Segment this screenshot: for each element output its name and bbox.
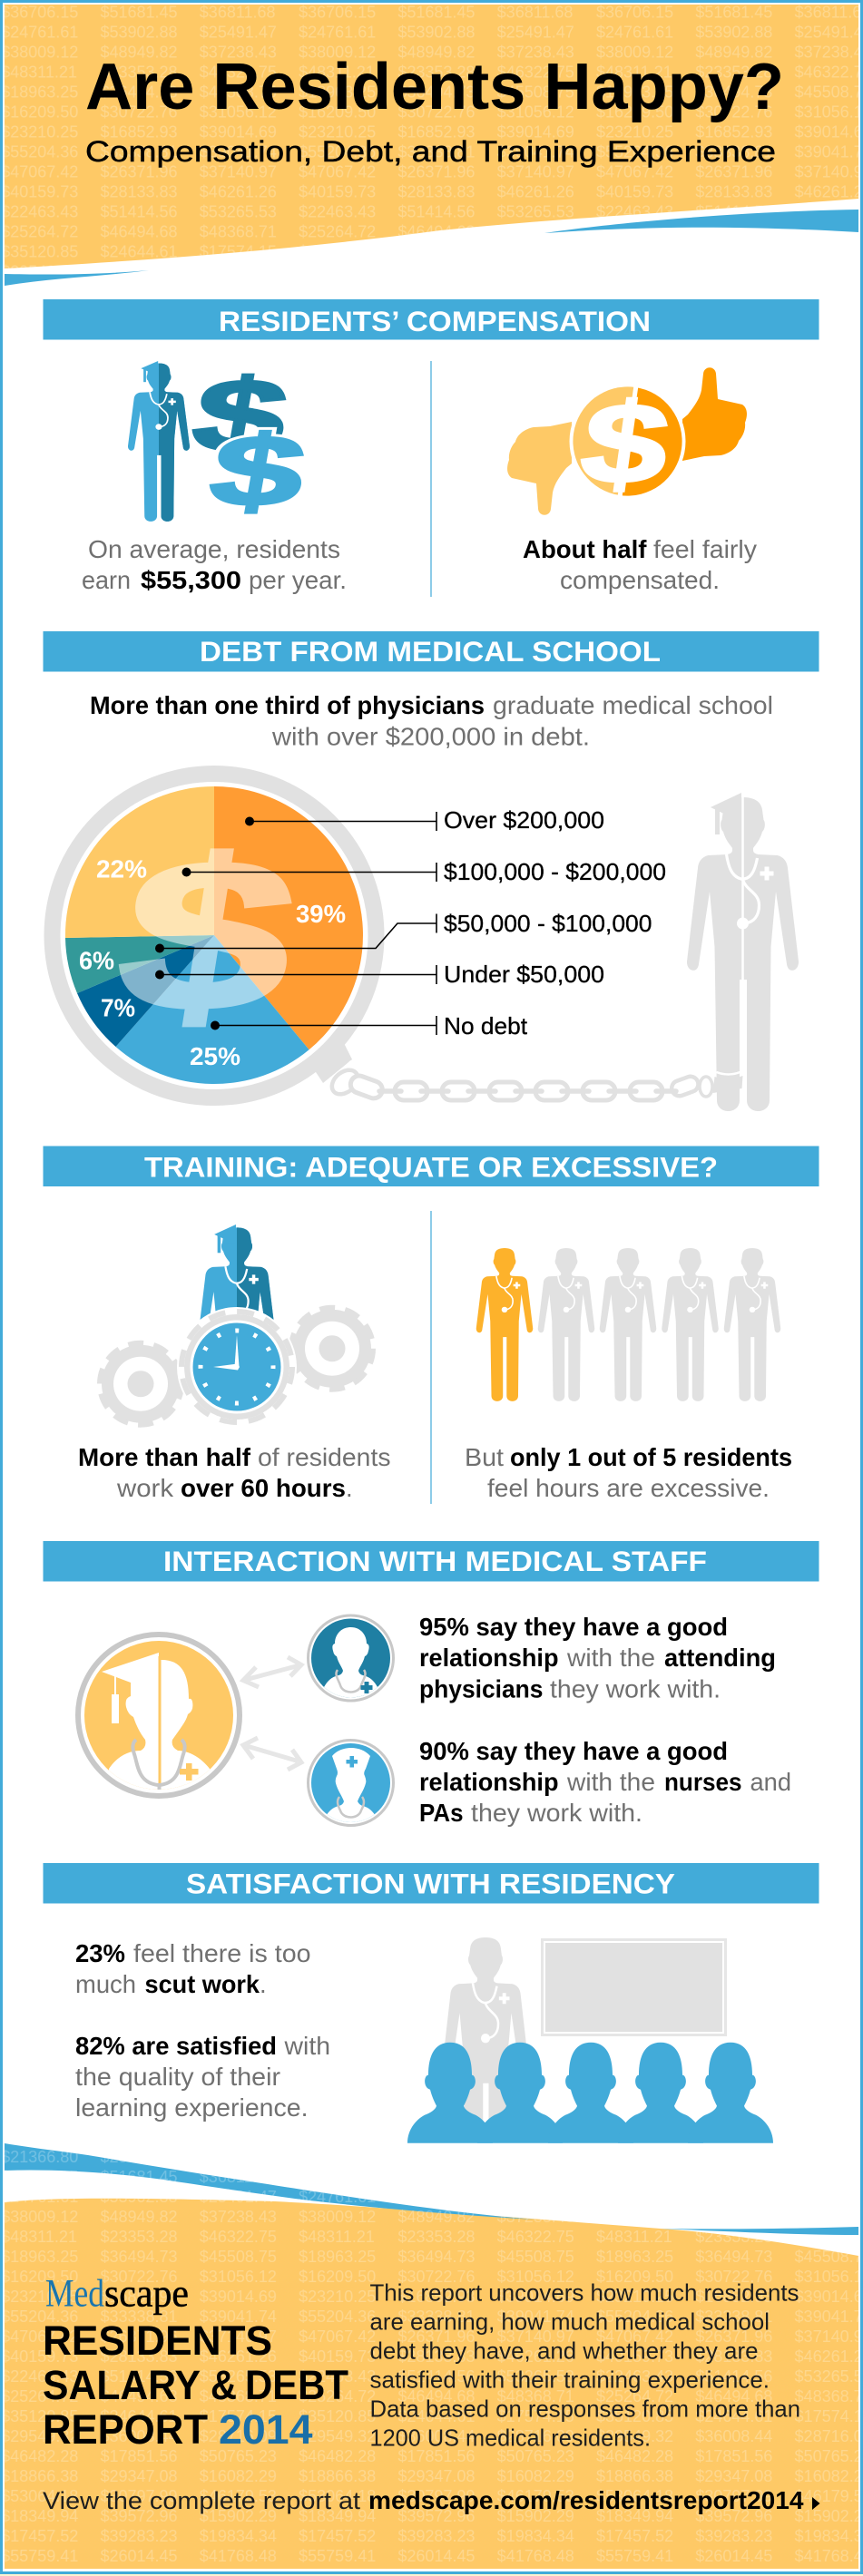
section heading: satisfaction: SATISFACTION WITH RESIDENCY: [186, 1867, 675, 1899]
percent labels: 39%: [296, 900, 346, 928]
text: relationship with nurses: relationship: [419, 1768, 559, 1796]
text: excessive hours: But: [465, 1443, 504, 1471]
text: scut work: feel there is too: [133, 1939, 310, 1967]
text: debt intro: with over $200,000 in debt.: [271, 722, 590, 751]
text: learning experience: 82% are satisfied: [75, 2032, 277, 2060]
text: fairly compensated: About half: [523, 535, 647, 563]
text: report description: 1200 US medical residents.: [370, 2424, 651, 2451]
section heading: training: TRAINING: ADEQUATE OR EXCESSIVE?: [144, 1150, 718, 1183]
report title: [43, 2317, 348, 2453]
call to action: medscape.com/residentsreport2014: [368, 2486, 804, 2514]
text: relationship with nurses: they work with.: [471, 1799, 642, 1827]
text: report description: This report uncovers how much residents: [370, 2278, 799, 2306]
text: relationship with attendings: with the: [566, 1644, 655, 1672]
icon: audience: [407, 2043, 773, 2143]
text: average earnings: per year.: [249, 566, 347, 594]
text: hours worked: .: [346, 1474, 353, 1502]
legend labels: Under $50,000: [444, 961, 604, 988]
percent labels: 7%: [101, 994, 135, 1021]
icon: grey residents: [538, 1248, 780, 1401]
legend labels: Over $200,000: [444, 806, 604, 834]
pie chart: debt distribution: [53, 774, 376, 1098]
icon: resident bust: [200, 1225, 274, 1320]
logo: Medscape: Med: [45, 2273, 104, 2315]
text: learning experience: [75, 2032, 330, 2122]
text: report description: [370, 2278, 800, 2451]
icon: five residents: [476, 1248, 780, 1401]
section heading: compensation: [44, 299, 819, 339]
section heading: training: [44, 1147, 819, 1186]
text: fairly compensated: compensated.: [560, 566, 720, 594]
slice: 50,000 to 100,000: [65, 935, 214, 993]
legend labels: $50,000 - $100,000: [444, 910, 652, 937]
text: hours worked: work: [116, 1474, 173, 1502]
icon: resident figure: [128, 361, 190, 522]
text: fairly compensated: feel fairly: [653, 535, 757, 563]
text: excessive hours: [465, 1443, 792, 1502]
icon: thumb up: [682, 367, 747, 461]
text: learning experience: the quality of their: [75, 2063, 280, 2091]
text: hours worked: More than half: [78, 1443, 251, 1471]
text: average earnings: earn: [82, 566, 131, 594]
section heading: interaction: INTERACTION WITH MEDICAL STAFF: [163, 1545, 707, 1577]
section heading: debt: DEBT FROM MEDICAL SCHOOL: [200, 635, 661, 668]
text: average earnings: $55,300: [141, 566, 241, 594]
text: learning experience: learning experience.: [75, 2093, 309, 2122]
title: Are Residents Happy?: [85, 51, 784, 123]
section heading: satisfaction: [44, 1863, 819, 1903]
icon: light dollar: $: [202, 415, 313, 526]
text: relationship with attendings: they work with.: [550, 1674, 721, 1703]
text: relationship with nurses: PAs: [419, 1799, 463, 1827]
icon: teacher: [445, 1937, 526, 2121]
text: relationship with nurses: and: [750, 1768, 791, 1796]
text: relationship with attendings: physicians: [419, 1674, 543, 1703]
legend labels: No debt: [444, 1012, 528, 1039]
legend labels: $100,000 - $200,000: [444, 858, 666, 885]
text: average earnings: On average, residents: [88, 535, 340, 563]
icon: grey resident in chains: [687, 793, 799, 1111]
text: report description: Data based on responses from more than: [370, 2395, 800, 2422]
report title: RESIDENTS: [43, 2317, 272, 2364]
text: scut work: .: [260, 1970, 267, 1998]
text: relationship with attendings: 95% say they have a good: [419, 1613, 728, 1641]
icon: clock in central gear: [177, 1307, 297, 1427]
icon: attending physician: [309, 1615, 394, 1705]
subtitle: Compensation, Debt, and Training Experience: [85, 135, 776, 168]
report title: 2014: [219, 2406, 312, 2453]
icon: nurse: [309, 1740, 394, 1825]
text: scut work: [75, 1939, 310, 1998]
icon: thumb down: [507, 422, 572, 515]
text: hours worked: over 60 hours: [181, 1474, 346, 1502]
text: fairly compensated: [523, 535, 757, 594]
text: relationship with nurses: [419, 1737, 791, 1827]
report title: REPORT: [43, 2406, 208, 2453]
logo: Medscape: [45, 2273, 189, 2315]
report title: DEBT: [245, 2362, 348, 2408]
header band: [5, 5, 858, 286]
icon: right gear: [291, 1308, 373, 1390]
slice: no debt: [116, 935, 309, 1084]
percent labels: 6%: [79, 947, 114, 974]
text: scut work: 23%: [75, 1939, 125, 1967]
text: scut work: scut work: [145, 1970, 260, 1998]
call to action: View the complete report at: [43, 2487, 361, 2514]
arrow: resident to nurses: [243, 1738, 301, 1770]
icon: thumbs with dollar coin: [507, 367, 747, 515]
text: debt intro: [90, 691, 773, 751]
logo: Medscape: scape: [104, 2273, 189, 2315]
section heading: compensation: RESIDENTS’ COMPENSATION: [219, 305, 651, 337]
text: excessive hours: only 1 out of 5 residents: [510, 1443, 792, 1471]
section heading: interaction: [44, 1541, 819, 1582]
percent labels: [79, 854, 346, 1070]
text: debt intro: graduate medical school: [493, 691, 773, 719]
text: report description: are earning, how much medical school: [370, 2308, 770, 2335]
icon: resident portrait: [78, 1634, 240, 1796]
text: scut work: much: [75, 1970, 136, 1998]
text: debt intro: More than one third of physicians: [90, 691, 485, 719]
icon: chain to resident: [309, 1041, 712, 1101]
text: report description: satisfied with their training experience.: [370, 2366, 770, 2393]
text: relationship with attendings: relationship: [419, 1644, 559, 1672]
icon: dark dollar: $: [184, 359, 296, 473]
slice: 100,000 to 200,000: [65, 786, 214, 938]
text: relationship with attendings: [419, 1613, 776, 1703]
text: relationship with nurses: with the: [566, 1768, 655, 1796]
text: relationship with nurses: 90% say they have a good: [419, 1737, 728, 1765]
report title: SALARY: [43, 2362, 201, 2408]
icon: light dollar: $: [202, 415, 313, 526]
percent labels: 25%: [190, 1042, 240, 1070]
text: excessive hours: feel hours are excessive.: [487, 1474, 770, 1502]
icon: resident with dollar signs: [128, 359, 313, 526]
icon: left gear: [100, 1343, 181, 1425]
text: hours worked: [78, 1443, 390, 1502]
text: relationship with nurses: nurses: [664, 1768, 742, 1796]
legend labels: [444, 806, 666, 1039]
text: hours worked: of residents: [258, 1443, 390, 1471]
percent labels: 22%: [96, 854, 147, 883]
chart leaders and legend: [155, 806, 666, 1039]
text: report description: debt they have, and whether they are: [370, 2337, 759, 2364]
text: average earnings: [82, 535, 347, 594]
icon: presentation screen: [543, 1939, 726, 2035]
section heading: debt: [44, 631, 819, 671]
footer band: [5, 2143, 858, 2569]
call to action: [43, 2486, 820, 2514]
report title: &: [211, 2362, 237, 2408]
text: relationship with attendings: attending: [664, 1644, 776, 1672]
text: learning experience: with: [283, 2032, 330, 2060]
icon: resident with clock and gears: [100, 1225, 373, 1441]
arrow: resident to attending: [243, 1657, 301, 1687]
icon: highlighted resident: [476, 1248, 533, 1401]
slice: over 200,000: [214, 786, 363, 1049]
icon: dollar overlay: $: [105, 817, 310, 1054]
icon: coin dollar: $: [574, 380, 677, 507]
icon: arrow: [812, 2497, 820, 2510]
slice: under 50,000: [77, 935, 214, 1047]
icon: classroom: [407, 1937, 773, 2143]
